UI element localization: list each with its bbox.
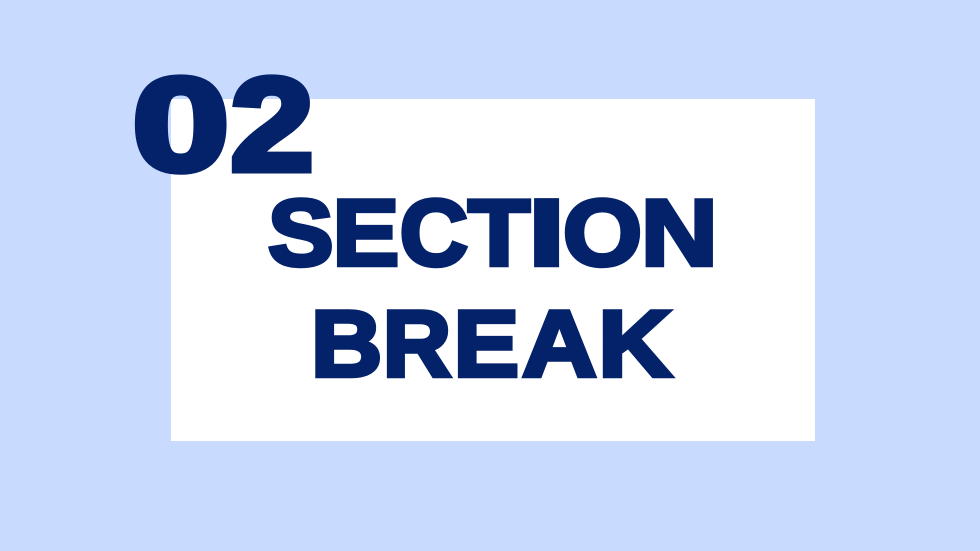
heading line 1: S bbox=[268, 180, 334, 285]
heading line 1: C bbox=[400, 180, 468, 285]
heading line 2: R bbox=[383, 291, 451, 396]
heading line 1: I bbox=[528, 180, 565, 285]
heading line 1: O bbox=[563, 180, 642, 285]
heading line 2: K bbox=[598, 291, 672, 396]
section number: 2 bbox=[231, 51, 314, 198]
heading line 2: A bbox=[522, 291, 597, 396]
heading line 2: E bbox=[454, 291, 519, 396]
heading line 1: N bbox=[641, 180, 718, 285]
heading line 1: E bbox=[333, 180, 399, 285]
heading line 2: B bbox=[311, 291, 382, 396]
heading line 1: T bbox=[468, 180, 530, 285]
section number: 0 bbox=[133, 51, 229, 198]
white panel bbox=[171, 99, 815, 441]
